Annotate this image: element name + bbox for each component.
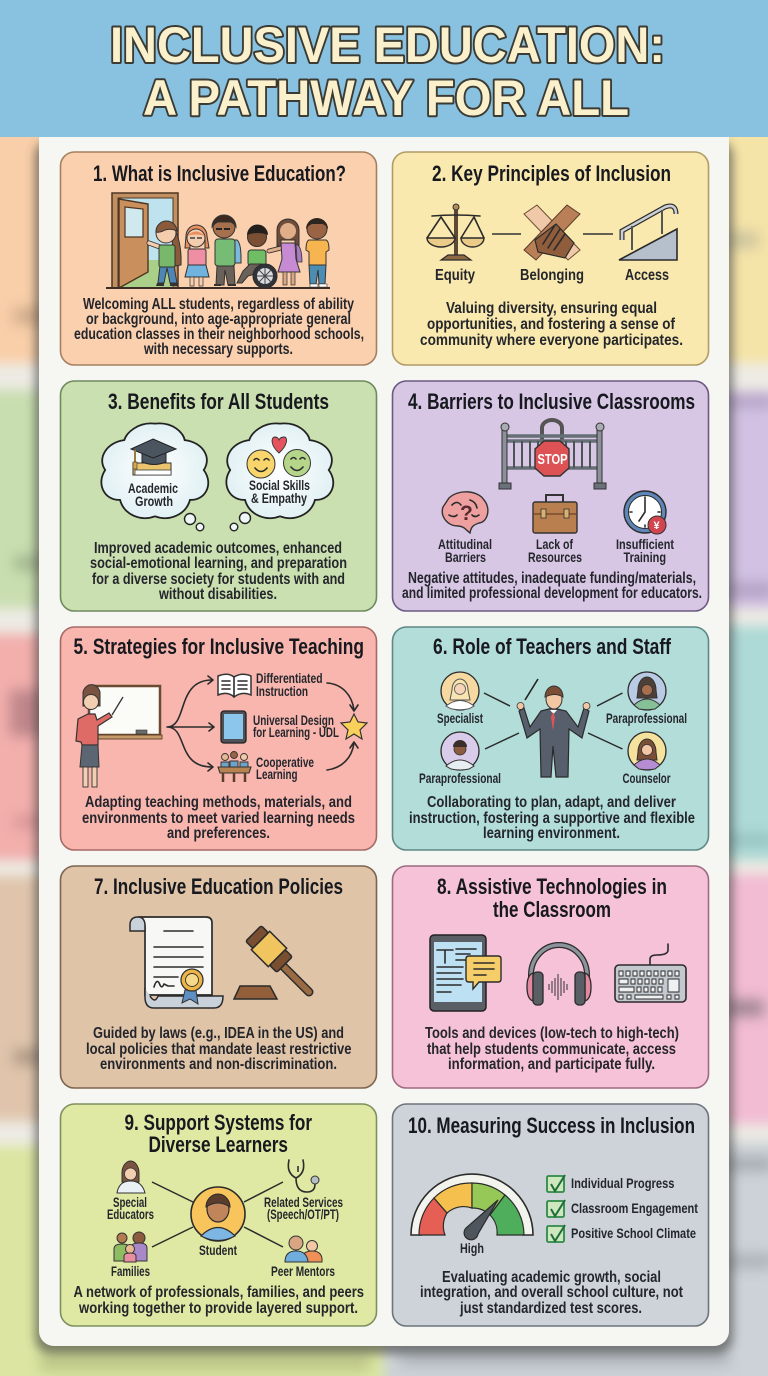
body text 10: just standardized test scores. <box>459 1300 642 1317</box>
icon: special educator <box>117 1161 145 1193</box>
barrier labels: Lack of <box>536 536 573 552</box>
barrier labels: Insufficient <box>616 536 674 552</box>
thought cloud: social skills <box>226 423 333 531</box>
support labels: Student <box>199 1242 237 1258</box>
support labels: Related Services <box>264 1194 343 1210</box>
icon: stethoscope <box>288 1160 319 1192</box>
heading 9: Diverse Learners <box>148 1132 288 1157</box>
icon: ramp with handrail <box>619 206 677 260</box>
icon: whiteboard <box>87 686 162 739</box>
body text 2: opportunities, and fostering a sense of <box>427 316 676 333</box>
role labels <box>419 710 687 786</box>
icon labels <box>435 267 669 284</box>
body text 7: local policies that mandate least restrictive <box>86 1041 352 1058</box>
icon: smiling faces and heart <box>247 437 310 478</box>
panel 9: support systems <box>60 1104 376 1326</box>
checklist <box>547 1175 698 1242</box>
body text 9: working together to provide layered support. <box>78 1300 358 1317</box>
icon: student at center <box>191 1187 245 1241</box>
body text 5: environments to meet varied learning needs <box>82 810 355 827</box>
barrier labels: Attitudinal <box>438 536 492 552</box>
body text 3: for a diverse society for students with and <box>92 571 345 588</box>
heading 9: 9. Support Systems for <box>124 1110 312 1135</box>
child with orange hair and glasses <box>185 225 209 286</box>
role labels: Paraprofessional <box>419 770 501 786</box>
title: A PATHWAY FOR ALL <box>143 70 629 126</box>
body text 8: information, and participate fully. <box>448 1056 655 1073</box>
strategy labels: Differentiated <box>256 670 322 686</box>
icon: gate with stop sign: STOP <box>538 451 568 468</box>
title: INCLUSIVE EDUCATION: <box>110 17 665 73</box>
checklist: Positive School Climate <box>571 1225 696 1241</box>
icon: keyboard <box>615 944 686 1002</box>
body text 1: education classes in their neighborhood schools, <box>74 326 364 343</box>
icon: tablet with speech bubble <box>430 935 501 1011</box>
body text 8: Tools and devices (low-tech to high-tech) <box>425 1025 679 1042</box>
child in purple dress <box>269 219 302 285</box>
body text 10: Evaluating academic growth, social <box>442 1269 661 1286</box>
icon: star with converging arrows <box>327 683 367 770</box>
arrows to strategies <box>167 676 214 771</box>
support labels: Educators <box>107 1206 154 1222</box>
icon: families <box>114 1232 147 1262</box>
role labels: Counselor <box>622 770 671 786</box>
connector lines <box>152 1182 283 1247</box>
support labels: Families <box>111 1263 150 1279</box>
body text 8: that help students communicate, access <box>427 1041 676 1058</box>
support labels <box>107 1194 343 1279</box>
connector <box>492 233 613 235</box>
icon: tablet <box>221 711 246 743</box>
heading 5: 5. Strategies for Inclusive Teaching <box>74 634 364 659</box>
panel 8: assistive technologies <box>392 866 708 1088</box>
support labels: Peer Mentors <box>271 1263 335 1279</box>
body text 9 <box>74 1284 364 1317</box>
panel 7: policies <box>60 866 376 1088</box>
strategy labels <box>253 670 339 782</box>
panel 1: what is inclusive education <box>60 152 376 365</box>
body text 1: Welcoming ALL students, regardless of ability <box>83 296 354 313</box>
heading 1: 1. What is Inclusive Education? <box>93 161 346 186</box>
icon: policy scroll with seal <box>130 917 223 1008</box>
body text 8 <box>425 1025 679 1073</box>
panel 3: benefits <box>60 381 376 611</box>
icon: brain with question mark <box>442 492 488 533</box>
thought cloud: academic growth: Growth <box>135 493 173 509</box>
body text 1: or background, into age-appropriate general <box>86 311 351 328</box>
child in orange shirt <box>306 218 329 287</box>
icon: scales <box>427 204 484 260</box>
connector lines <box>484 693 622 749</box>
panel 2: key principles <box>392 152 708 365</box>
body text 6: Collaborating to plan, adapt, and deliver <box>427 794 676 811</box>
body text 5 <box>82 794 355 842</box>
icon: teacher <box>76 685 123 787</box>
heading 6: 6. Role of Teachers and Staff <box>433 634 672 659</box>
icon labels: Equity <box>435 267 475 284</box>
panel 10: measuring success <box>392 1104 708 1326</box>
icon labels: Access <box>625 267 669 284</box>
checklist: Individual Progress <box>571 1175 675 1191</box>
heading 2: 2. Key Principles of Inclusion <box>432 161 671 186</box>
icon labels: Belonging <box>520 267 584 284</box>
panel 4: barriers <box>392 381 708 611</box>
icon: gate with stop sign <box>499 420 606 489</box>
strategy labels: Instruction <box>256 683 308 699</box>
body text 1 <box>74 296 364 358</box>
body text 5: Adapting teaching methods, materials, and <box>85 794 352 811</box>
child in wheelchair <box>237 224 277 288</box>
thought cloud: academic growth <box>101 423 208 531</box>
role labels: Paraprofessional <box>606 710 687 726</box>
icon: joined hands <box>524 205 580 260</box>
body text 9: A network of professionals, families, and peers <box>74 1284 364 1301</box>
body text 1: with necessary supports. <box>143 341 293 358</box>
thought cloud: social skills: Social Skills <box>249 477 310 493</box>
body text 10: integration, and overall school culture, not <box>420 1284 684 1301</box>
icon: clock with alert: ¥ <box>654 520 660 532</box>
gauge label: High <box>460 1240 484 1256</box>
icon: peer mentors <box>285 1236 322 1262</box>
body text 4 <box>402 570 702 602</box>
body text 2 <box>420 300 683 349</box>
heading 3: 3. Benefits for All Students <box>108 389 329 414</box>
title <box>110 17 665 126</box>
strategy labels: Universal Design <box>253 712 334 728</box>
icon: gavel <box>234 924 309 999</box>
heading 8 <box>437 874 667 922</box>
body text 6 <box>409 794 695 842</box>
icon: headphones <box>527 945 591 1005</box>
thought cloud: social skills: & Empathy <box>251 490 307 506</box>
body text 3: social-emotional learning, and preparation <box>90 555 347 572</box>
barrier labels <box>438 536 674 565</box>
body text 3: without disabilities. <box>158 586 277 603</box>
panel 6: teachers and staff <box>392 627 708 850</box>
portrait: paraprofessional 2 <box>441 732 479 770</box>
thought cloud: academic growth: Academic <box>128 480 178 496</box>
body text 2: Valuing diversity, ensuring equal <box>446 300 657 317</box>
icon: clock with alert <box>624 491 666 534</box>
heading 4: 4. Barriers to Inclusive Classrooms <box>408 389 695 414</box>
body text 6: instruction, fostering a supportive and flexible <box>409 810 695 827</box>
heading 8: the Classroom <box>493 897 611 922</box>
support labels: Special <box>113 1194 147 1210</box>
portrait: counselor <box>628 732 666 770</box>
child with glasses and backpack <box>212 215 241 286</box>
body text 2: community where everyone participates. <box>420 332 683 349</box>
body text 7 <box>86 1025 352 1073</box>
header band <box>0 0 768 137</box>
body text 7: Guided by laws (e.g., IDEA in the US) and <box>93 1025 344 1042</box>
icon: briefcase <box>533 495 577 533</box>
icon: conductor figure <box>517 679 590 777</box>
portrait: paraprofessional 1 <box>628 672 666 710</box>
icon: open book <box>218 674 251 697</box>
heading 7: 7. Inclusive Education Policies <box>94 874 343 899</box>
role labels: Specialist <box>437 710 483 726</box>
strategy labels: Cooperative <box>256 754 314 770</box>
body text 7: environments and non-discrimination. <box>100 1056 337 1073</box>
gauge <box>411 1174 533 1240</box>
body text 10 <box>420 1269 684 1317</box>
heading 8: 8. Assistive Technologies in <box>437 874 667 899</box>
heading 10: 10. Measuring Success in Inclusion <box>408 1113 695 1138</box>
body text 5: and preferences. <box>167 825 270 842</box>
barrier labels: Barriers <box>445 549 486 565</box>
barrier labels: Resources <box>528 549 582 565</box>
body text 3: Improved academic outcomes, enhanced <box>94 540 342 557</box>
illustration: students at classroom door <box>106 193 330 288</box>
icon: group at table <box>218 752 251 782</box>
icon: graduation cap on books <box>131 439 176 475</box>
barrier labels: Training <box>624 549 666 565</box>
child at door <box>149 221 181 286</box>
body text 6: learning environment. <box>483 825 620 842</box>
strategy labels: for Learning - UDL <box>253 724 339 740</box>
portrait: specialist <box>441 672 479 710</box>
strategy labels: Learning <box>256 766 298 782</box>
checklist: Classroom Engagement <box>571 1200 698 1216</box>
support labels: (Speech/OT/PT) <box>267 1206 339 1222</box>
body text 3 <box>90 540 347 603</box>
icon: brain with question mark: ? <box>460 502 473 525</box>
heading 9 <box>124 1110 312 1157</box>
panel 5: strategies <box>60 627 376 850</box>
